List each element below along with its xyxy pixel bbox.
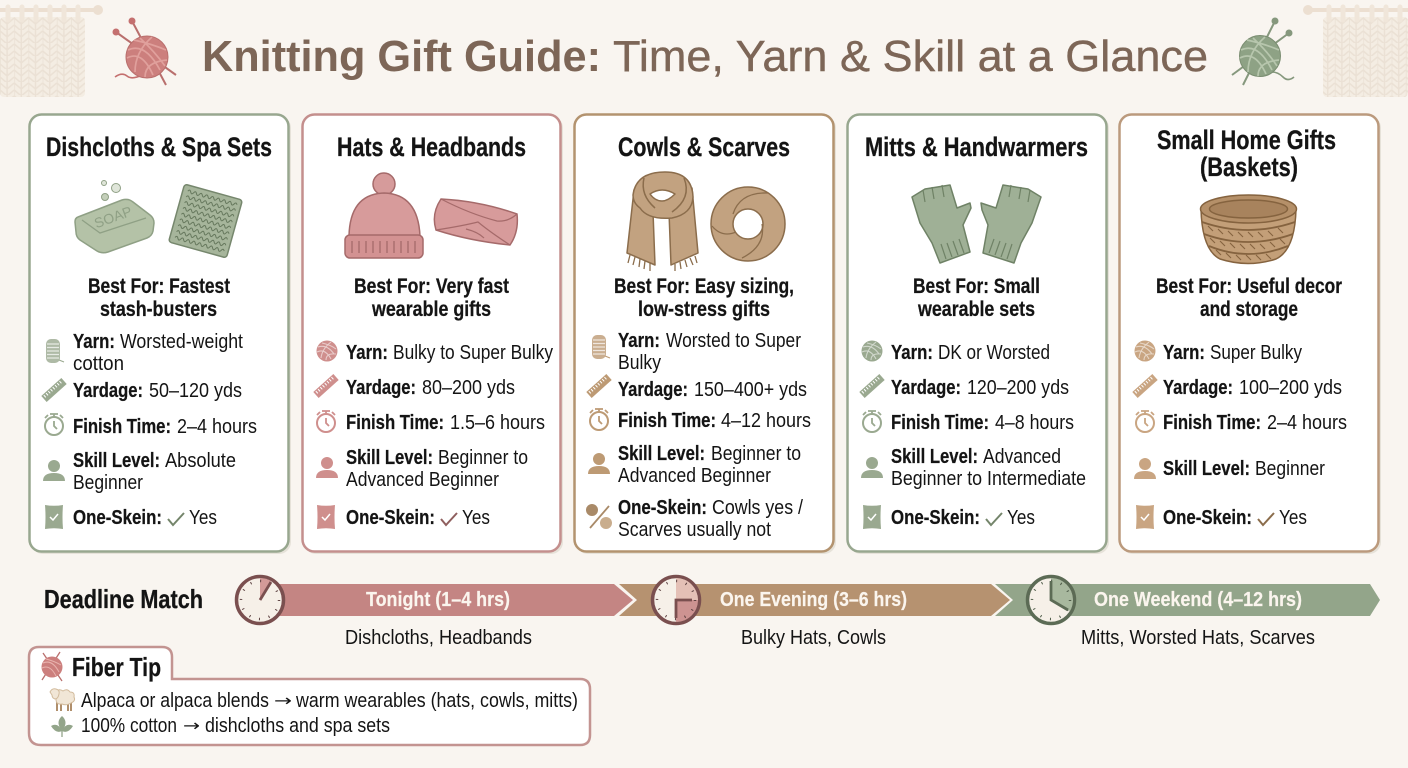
yarn row: Bulky bbox=[618, 351, 662, 374]
skill level row bbox=[1134, 457, 1325, 480]
icon: sheep bbox=[50, 689, 75, 711]
yardage row: Yardage: bbox=[73, 379, 143, 402]
title: Knitting Gift Guide: bbox=[202, 32, 601, 81]
icon: knitted dishcloth bbox=[169, 184, 242, 258]
best for: Best For: Very fast bbox=[354, 275, 509, 298]
card frame bbox=[574, 114, 834, 552]
card heading: Cowls & Scarves bbox=[618, 132, 790, 162]
best for: Best For: Easy sizing, bbox=[614, 275, 794, 298]
finish time row bbox=[317, 411, 545, 434]
skill level row bbox=[43, 449, 236, 494]
callout: Fiber Tip bbox=[29, 647, 590, 745]
card heading bbox=[1157, 125, 1336, 182]
card frame bbox=[30, 114, 288, 552]
icon: twisted headband bbox=[434, 199, 517, 245]
alpaca tip: warm wearables (hats, cowls, mitts) bbox=[295, 689, 578, 712]
yarn row: Yarn: bbox=[346, 341, 388, 364]
one-skein row bbox=[317, 505, 490, 529]
icon: left mitt bbox=[912, 185, 971, 263]
yarn row: Worsted to Super bbox=[666, 329, 801, 352]
yardage row: 100–200 yds bbox=[1239, 376, 1342, 399]
best for bbox=[913, 275, 1040, 321]
skill level row: Beginner bbox=[73, 471, 143, 494]
yarn row: Yarn: bbox=[1163, 341, 1205, 364]
heading: Fiber Tip bbox=[72, 652, 161, 682]
icon: clock one evening bbox=[652, 576, 700, 624]
alpaca tip bbox=[81, 689, 578, 712]
finish time row: Finish Time: bbox=[618, 409, 716, 432]
yarn row bbox=[46, 330, 243, 375]
heading: Deadline Match: Deadline Match bbox=[44, 584, 203, 614]
skill level row bbox=[588, 442, 801, 487]
card heading: Dishcloths & Spa Sets bbox=[46, 132, 272, 162]
finish time row: Finish Time: bbox=[73, 415, 171, 438]
finish time row: 1.5–6 hours bbox=[450, 411, 545, 434]
yardage row: Yardage: bbox=[1163, 376, 1233, 399]
yardage row: Yardage: bbox=[618, 378, 688, 401]
yarn row: Worsted-weight bbox=[120, 330, 243, 353]
card frame bbox=[1120, 114, 1378, 552]
card heading: Small Home Gifts bbox=[1157, 125, 1336, 155]
deadline items: tonight: Dishcloths, Headbands bbox=[345, 626, 532, 649]
deadline items: one weekend: Mitts, Worsted Hats, Scarves bbox=[1081, 626, 1315, 649]
finish time row: 2–4 hours bbox=[177, 415, 257, 438]
skill level row: Skill Level: bbox=[891, 445, 978, 468]
finish time row: 2–4 hours bbox=[1267, 411, 1347, 434]
finish time row: 4–12 hours bbox=[721, 409, 811, 432]
finish time row bbox=[1136, 411, 1347, 434]
one-skein row: One-Skein: bbox=[1163, 506, 1252, 529]
finish time row bbox=[863, 411, 1074, 434]
skill level row: Beginner to bbox=[711, 442, 801, 465]
finish time row: Finish Time: bbox=[346, 411, 444, 434]
yarn row bbox=[862, 340, 1050, 364]
best for bbox=[1156, 275, 1342, 321]
panel: Dishcloths & Spa Sets bbox=[30, 114, 291, 554]
deadline items: one evening: Bulky Hats, Cowls bbox=[741, 626, 886, 649]
arrow: Tonight: Tonight (1–4 hrs) bbox=[366, 588, 510, 611]
skill level row: Beginner to Intermediate bbox=[891, 467, 1086, 490]
icon: green yarn ball with needles bbox=[1232, 18, 1294, 85]
yardage row: Yardage: bbox=[891, 376, 961, 399]
yarn row: Yarn: bbox=[618, 329, 660, 352]
card frame bbox=[848, 114, 1106, 552]
yarn row bbox=[316, 340, 554, 364]
arrow: One Weekend: One Weekend (4–12 hrs) bbox=[1094, 588, 1302, 611]
icon: soap bar bbox=[75, 180, 154, 253]
arrow: Tonight bbox=[250, 584, 633, 616]
yarn row: Bulky to Super Bulky bbox=[393, 341, 554, 364]
decoration: knitted swatch left bbox=[0, 5, 103, 97]
best for bbox=[354, 275, 509, 321]
best for bbox=[88, 275, 230, 321]
one-skein row bbox=[45, 505, 217, 529]
one-skein row: One-Skein: bbox=[346, 506, 435, 529]
yarn row: DK or Worsted bbox=[938, 341, 1050, 364]
skill level row: Skill Level: bbox=[346, 446, 433, 469]
icon: beanie hat bbox=[345, 173, 423, 258]
best for: and storage bbox=[1200, 298, 1298, 321]
yardage row: 120–200 yds bbox=[967, 376, 1069, 399]
card heading: (Baskets) bbox=[1200, 152, 1298, 182]
skill level row: Advanced Beginner bbox=[346, 468, 499, 491]
icon: scarf bbox=[627, 172, 698, 271]
yarn row: Yarn: bbox=[73, 330, 115, 353]
finish time row: Finish Time: bbox=[891, 411, 989, 434]
skill level row: Beginner bbox=[1255, 457, 1325, 480]
best for: Best For: Fastest bbox=[88, 275, 230, 298]
panel: Cowls & Scarves bbox=[574, 114, 836, 554]
best for: stash-busters bbox=[100, 298, 217, 321]
icon: clock one weekend bbox=[1028, 576, 1074, 624]
best for: low-stress gifts bbox=[638, 298, 770, 321]
best for bbox=[614, 275, 794, 321]
skill level row: Advanced bbox=[983, 445, 1061, 468]
panel: Small Home Gifts (Baskets) bbox=[1120, 114, 1381, 554]
icon: soap bar: SOAP bbox=[92, 203, 134, 231]
finish time row bbox=[590, 409, 811, 432]
title: Time, Yarn & Skill at a Glance bbox=[613, 32, 1208, 81]
decoration: knitted swatch right bbox=[1303, 5, 1408, 97]
arrow: One Evening: One Evening (3–6 hrs) bbox=[720, 588, 907, 611]
yardage row bbox=[313, 374, 515, 399]
card frame bbox=[302, 114, 560, 552]
arrow: One Evening bbox=[619, 584, 1010, 616]
yarn row: cotton bbox=[73, 352, 124, 375]
cotton tip: → bbox=[183, 716, 200, 735]
best for: Best For: Useful decor bbox=[1156, 275, 1342, 298]
yarn row: Yarn: bbox=[891, 341, 933, 364]
skill level row: Skill Level: bbox=[1163, 457, 1250, 480]
skill level row: Beginner to bbox=[438, 446, 528, 469]
icon: clock tonight bbox=[236, 576, 284, 624]
card heading: Hats & Headbands bbox=[337, 132, 526, 162]
best for: wearable gifts bbox=[371, 298, 491, 321]
one-skein row: Cowls yes / bbox=[712, 496, 803, 519]
skill level row: Skill Level: bbox=[73, 449, 160, 472]
yarn row bbox=[1134, 340, 1303, 364]
cotton tip: 100% cotton bbox=[81, 714, 177, 737]
yardage row bbox=[859, 374, 1069, 399]
icon: cotton leaf bbox=[51, 716, 73, 737]
yardage row: 80–200 yds bbox=[422, 376, 515, 399]
panel: Mitts & Handwarmers bbox=[848, 114, 1109, 554]
one-skein row bbox=[863, 505, 1035, 529]
one-skein row bbox=[586, 496, 803, 541]
one-skein row: One-Skein: bbox=[891, 506, 980, 529]
one-skein row: Scarves usually not bbox=[618, 518, 771, 541]
one-skein row: Yes bbox=[189, 506, 217, 529]
card heading: Mitts & Handwarmers bbox=[865, 132, 1088, 162]
skill level row bbox=[861, 445, 1086, 490]
best for: Best For: Small bbox=[913, 275, 1040, 298]
cotton tip: dishcloths and spa sets bbox=[205, 714, 390, 737]
one-skein row: One-Skein: bbox=[618, 496, 707, 519]
arrow: One Weekend bbox=[995, 584, 1380, 616]
icon: yarn ball bbox=[42, 652, 62, 681]
finish time row bbox=[45, 414, 257, 438]
finish time row: 4–8 hours bbox=[995, 411, 1074, 434]
one-skein row: Yes bbox=[1279, 506, 1307, 529]
yardage row bbox=[586, 374, 807, 401]
yardage row: Yardage: bbox=[346, 376, 416, 399]
yardage row bbox=[1132, 374, 1342, 399]
icon: right mitt bbox=[981, 185, 1041, 263]
yardage row: 150–400+ yds bbox=[694, 378, 807, 401]
alpaca tip: → bbox=[274, 691, 292, 710]
alpaca tip: Alpaca or alpaca blends bbox=[81, 689, 269, 712]
finish time row: Finish Time: bbox=[1163, 411, 1261, 434]
best for: wearable sets bbox=[917, 298, 1035, 321]
skill level row: Skill Level: bbox=[618, 442, 705, 465]
yardage row: 50–120 yds bbox=[149, 379, 242, 402]
cotton tip bbox=[81, 714, 390, 737]
panel: Hats & Headbands bbox=[302, 114, 563, 554]
yarn row bbox=[592, 329, 801, 374]
skill level row bbox=[316, 446, 528, 491]
icon: cowl bbox=[711, 187, 785, 261]
one-skein row: Yes bbox=[1007, 506, 1035, 529]
yarn row: Super Bulky bbox=[1210, 341, 1303, 364]
one-skein row: One-Skein: bbox=[73, 506, 162, 529]
one-skein row: Yes bbox=[462, 506, 490, 529]
skill level row: Advanced Beginner bbox=[618, 464, 771, 487]
icon: woven basket bbox=[1200, 195, 1296, 264]
yardage row bbox=[41, 378, 242, 402]
icon: rose yarn ball with needles bbox=[112, 18, 176, 85]
one-skein row bbox=[1136, 505, 1307, 529]
skill level row: Absolute bbox=[165, 449, 236, 472]
title bbox=[202, 32, 1208, 81]
